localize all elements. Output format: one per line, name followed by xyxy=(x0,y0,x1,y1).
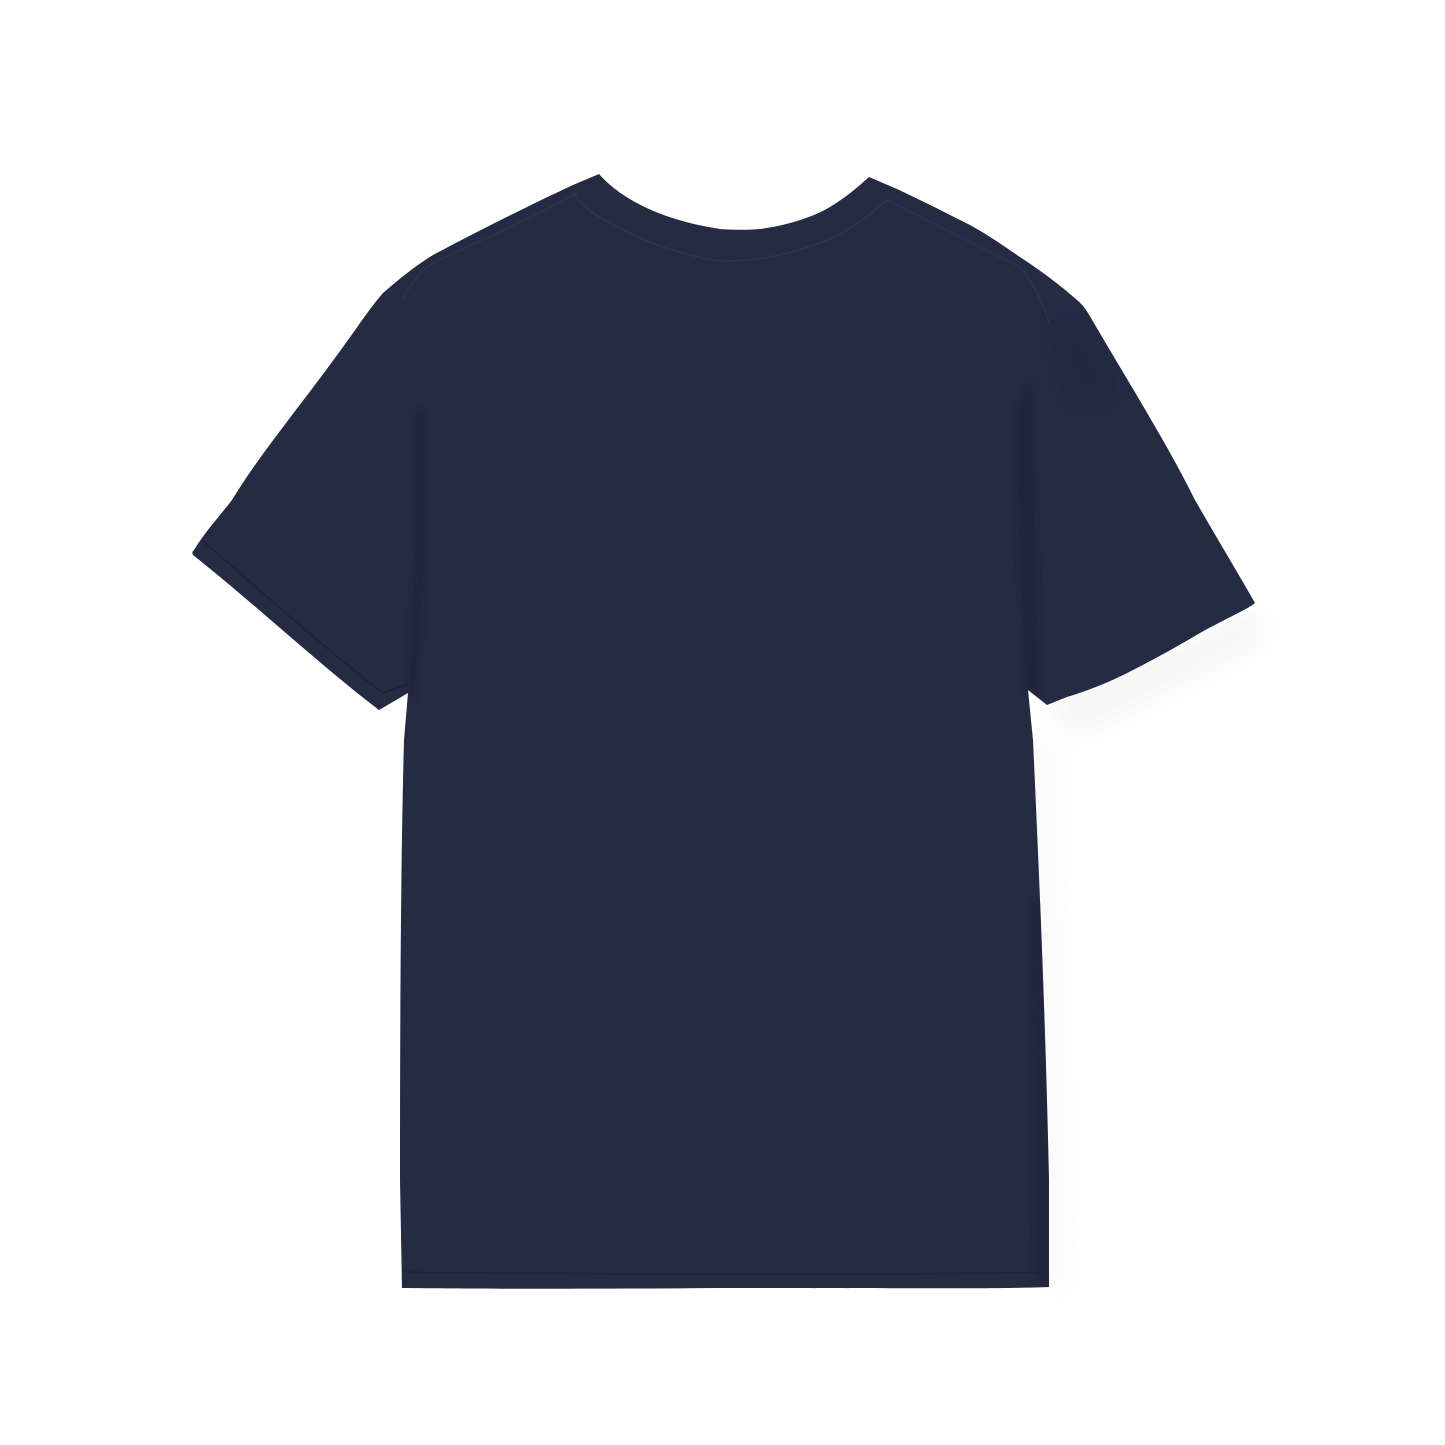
shirt body and sleeves silhouette xyxy=(192,174,1255,1289)
right shoulder seam xyxy=(887,200,1050,325)
right sleeve shading xyxy=(1045,320,1125,410)
left underarm crease xyxy=(406,414,421,698)
left shoulder seam xyxy=(402,193,577,300)
t-shirt garment xyxy=(192,174,1255,1289)
soft drop shadow to the right of the shirt xyxy=(1036,610,1262,1295)
fabric shading and seams xyxy=(203,187,1125,1287)
bottom hem stitch xyxy=(402,1272,1049,1274)
left sleeve hem stitch xyxy=(203,541,408,693)
right side edge shading xyxy=(1038,901,1049,1288)
right underarm crease xyxy=(1020,398,1036,696)
product image: navy t-shirt back view xyxy=(192,174,1255,1289)
collar rib seam xyxy=(573,187,887,261)
